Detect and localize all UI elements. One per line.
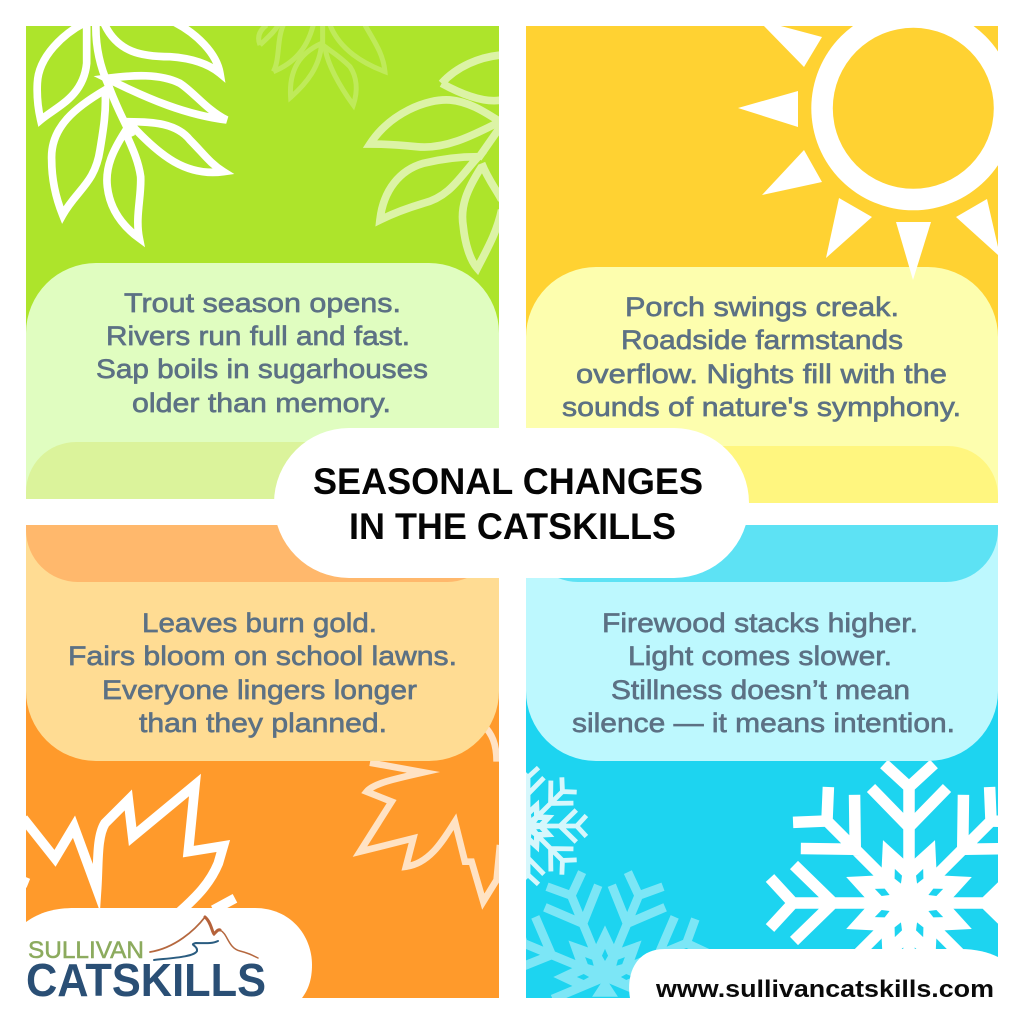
icon: white leaves left	[37, 22, 227, 238]
text: winter lines	[572, 608, 955, 738]
text: spring lines: Sap boils in sugarhouses	[96, 354, 428, 384]
icon: faded leaves top	[259, 25, 385, 105]
icon: large snowflake	[766, 760, 998, 950]
heading	[313, 461, 703, 547]
text: autumn lines: Fairs bloom on school lawns.	[68, 641, 457, 671]
text card: spring	[26, 263, 499, 499]
text: summer lines	[562, 292, 961, 422]
text: summer lines: sounds of nature's symphony.	[562, 392, 961, 422]
text: autumn lines: Everyone lingers longer	[102, 675, 417, 705]
text: spring lines: Rivers run full and fast.	[106, 321, 410, 351]
text card: summer	[526, 222, 998, 503]
text: Sullivan: SULLIVAN	[28, 937, 144, 964]
text: spring lines: Trout season opens.	[124, 288, 401, 318]
title pill	[274, 428, 749, 578]
icon: faded leaves right	[370, 55, 502, 268]
text: website: www.sullivancatskills.com	[655, 976, 994, 1003]
icon: sun	[738, 26, 998, 258]
icon: sun bottom ray	[896, 222, 931, 280]
text: winter lines: silence — it means intention.	[572, 708, 955, 738]
text: summer lines: Roadside farmstands	[621, 325, 903, 355]
logo block	[26, 908, 312, 1006]
website pill	[629, 949, 998, 1003]
panel: summer	[526, 6, 1015, 503]
text: spring lines: older than memory.	[132, 388, 391, 418]
text: autumn lines: than they planned.	[139, 708, 387, 738]
icon: mountain and river	[150, 917, 258, 960]
text: winter lines: Firewood stacks higher.	[602, 608, 918, 638]
icon: faded maple leaf	[360, 725, 500, 902]
text card: autumn	[26, 525, 499, 761]
icon: small snowflake	[526, 766, 588, 886]
text card: winter	[526, 525, 998, 761]
text: autumn lines	[68, 608, 457, 738]
heading: IN THE CATSKILLS	[349, 506, 676, 547]
text: summer lines: overflow. Nights fill with the	[576, 359, 947, 389]
icon: white maple leaf	[20, 785, 235, 912]
panel: autumn	[20, 525, 500, 998]
text: summer lines: Porch swings creak.	[625, 292, 899, 322]
text: winter lines: Light comes slower.	[628, 641, 892, 671]
panel: spring	[26, 22, 502, 499]
icon: faded snowflake	[526, 870, 709, 998]
text: Catskills: CATSKILLS	[26, 954, 266, 1006]
heading: SEASONAL CHANGES	[313, 461, 703, 502]
text: autumn lines: Leaves burn gold.	[142, 608, 377, 638]
text: winter lines: Stillness doesn’t mean	[611, 675, 910, 705]
panel: winter	[526, 525, 998, 998]
text: spring lines	[96, 288, 428, 418]
